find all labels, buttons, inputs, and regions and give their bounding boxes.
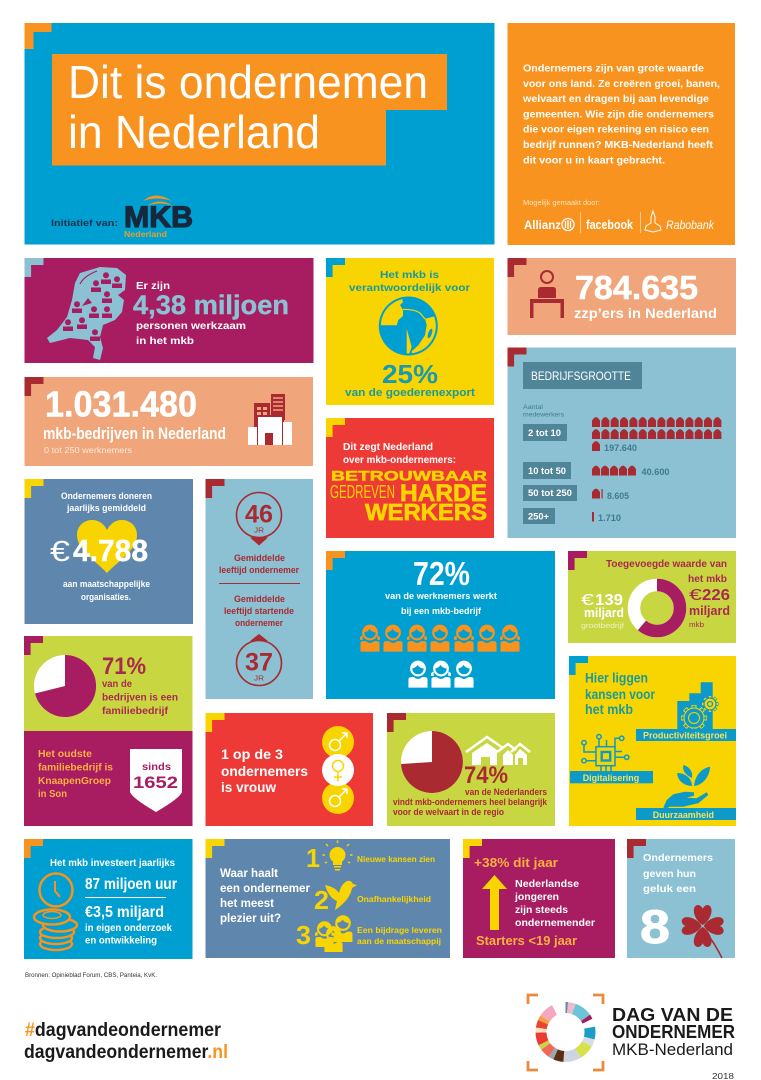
caption: investment: in eigen onderzoek [85, 923, 172, 934]
text: young people: ondernemender [515, 917, 595, 929]
caption: zzp: zzp’ers in Nederland [574, 305, 717, 321]
sponsors: Mogelijk gemaakt door: [523, 198, 600, 207]
chart: pie 74% [401, 731, 463, 793]
item 2: independence: 2 [314, 885, 329, 915]
question [220, 868, 311, 925]
text: happiness: geluk een [643, 883, 696, 895]
text: 1 in 3: 1 op de 3 [221, 746, 283, 762]
caption: donations: organisaties. [81, 592, 131, 603]
panel: wat zegt Nederland [326, 418, 494, 538]
heading: added value: het mkb [688, 574, 727, 585]
caption: export: van de goederenexport [345, 387, 475, 399]
logo: Dag van de Ondernemer: DAG VAN DE [612, 1005, 733, 1025]
caption: family companies: familiebedrijf [102, 706, 169, 717]
panel: added value [568, 551, 736, 643]
intro text: welvaart en dragen bij aan levendige [522, 93, 709, 105]
icon: coins [34, 910, 77, 950]
stat: 8: 8 [640, 900, 670, 953]
heading: opportunities: kansen voor [585, 687, 656, 702]
initiative label: Initiatief van: [51, 218, 118, 228]
heading: opportunities [585, 670, 656, 717]
label: grootbedrijf [581, 592, 624, 630]
caption: welfare: van de Nederlanders [465, 787, 547, 797]
item 2: independence: Onafhankelijkheid [357, 894, 431, 904]
stat: zzp number: 784.635 [575, 269, 698, 306]
stat: hours: 87 miljoen uur [85, 876, 177, 893]
icon: chip [582, 734, 629, 772]
sponsors: facebook [586, 217, 634, 232]
word cloud: GEDREVEN [330, 482, 395, 502]
item 3: contribution [296, 916, 442, 952]
label: mkb: 226 [702, 587, 730, 604]
row: 2 tot 10 [523, 417, 721, 453]
item 1: new opportunities [306, 840, 435, 873]
axis label: Aantal [523, 404, 544, 411]
caption: donations: aan maatschappelijke [63, 579, 150, 590]
caption: family companies: van de [102, 679, 132, 690]
caption: starter age: leeftijd startende [224, 606, 294, 616]
caption: family companies: bedrijven is een [102, 692, 178, 704]
row: 10 tot 50 [523, 462, 670, 479]
row: 50 tot 250: 50 tot 250 [528, 488, 572, 498]
sources: Bronnen: Opinieblad Forum, CBS, Panteia, KvK. [25, 972, 157, 979]
axis label: medewerkers [523, 412, 565, 418]
word cloud: BETROUWBAAR [331, 468, 487, 484]
caption: welfare [393, 787, 548, 817]
stat: 72%: 72% [413, 555, 470, 592]
text: young people: Nederlandse [515, 878, 579, 890]
text: oldest company: Het oudste [38, 749, 92, 760]
caption: starters: Starters <19 jaar [476, 934, 577, 948]
item 1: new opportunities: 1 [306, 843, 320, 873]
label: duurzaamheid [636, 808, 736, 821]
heading: opportunities: het mkb [585, 702, 633, 717]
chart: pie 71% [34, 655, 96, 717]
caption: employees [385, 591, 498, 617]
text: workers [133, 280, 289, 347]
text: oldest company: familiebedrijf is [38, 762, 113, 774]
icon: clock [40, 874, 72, 906]
stat: 25%: 25% [382, 359, 438, 389]
question: een ondernemer [220, 883, 311, 895]
caption: investment [85, 923, 172, 946]
text: oldest company: in Son [38, 789, 67, 800]
heading: investment: Het mkb investeert jaarlijks [50, 858, 175, 869]
text: young people [514, 878, 595, 929]
stat: 71%: 71% [102, 653, 146, 680]
icon: houses [466, 737, 530, 765]
heading: bedrijfsgrootte: BEDRIJFSGROOTTE [531, 369, 631, 383]
question: Waar haalt [220, 868, 278, 880]
label: mkb: mkb [689, 622, 704, 629]
icon: growth bars and gears [677, 682, 718, 731]
heading: bedrijfsgrootte [523, 362, 642, 389]
icon: globe [378, 295, 440, 356]
row: 50 tot 250 [523, 485, 629, 501]
stat: donation amount: 4.788 [73, 533, 148, 568]
badge: age 46: JR [254, 526, 265, 534]
heading: donations: Ondernemers doneren [61, 491, 152, 502]
text: workers: 4,38 miljoen [133, 290, 289, 320]
text: 1 in 3 [221, 746, 308, 795]
logo: MKB Nederland: Nederland [124, 229, 167, 239]
badge: age 37 [236, 634, 282, 686]
text: oldest company: KnaapenGroep [38, 776, 111, 787]
heading: opinion [343, 442, 456, 466]
heading: export: Het mkb is [380, 269, 439, 281]
heading: export: verantwoordelijk voor [349, 282, 470, 294]
item 3: contribution: 3 [296, 920, 311, 950]
sub caption: 0 tot 250 werknemers [44, 445, 132, 455]
heading: added value: Toegevoegde waarde van [606, 559, 727, 570]
panel: average age [206, 479, 313, 699]
stat: amount: €3,5 miljard [85, 904, 164, 921]
caption: investment: en ontwikkeling [85, 936, 157, 946]
text: happiness [643, 852, 713, 895]
heading: donations [61, 491, 152, 514]
text: workers: in het mkb [136, 335, 194, 347]
row: 2 tot 10: 2 tot 10 [528, 428, 561, 438]
caption: welfare: vindt mkb-ondernemers heel belangrijk [393, 797, 548, 807]
panel: donations [24, 479, 193, 624]
intro text: die voor eigen rekening en risico een [523, 124, 709, 136]
badge: age 46 [236, 492, 282, 546]
badge: since 1652 [130, 749, 182, 812]
chart: donut [634, 585, 680, 631]
row: 250+ [523, 508, 621, 524]
intro text: bedrijf runnen? MKB-Nederland heeft [523, 139, 713, 151]
row: 10 tot 50: 40.600 [642, 467, 670, 477]
logo: MKB Nederland: MKB [124, 201, 193, 234]
row: 10 tot 50: 10 tot 50 [528, 466, 566, 476]
stat: number of companies: 1.031.480 [45, 384, 197, 424]
icons: gender symbols [322, 726, 354, 814]
text: workers: Er zijn [136, 280, 170, 292]
sponsors [523, 198, 715, 233]
panel: zzp [507, 258, 736, 335]
row: 2 tot 10: 197.640 [604, 443, 637, 453]
label: digitalisering [570, 771, 653, 784]
title: in Nederland [68, 106, 320, 158]
question: het meest [220, 898, 274, 910]
caption: employees: van de werknemers werkt [385, 591, 498, 602]
hashtag: #dagvandeondernemer [25, 1020, 222, 1041]
item 2: independence [314, 881, 431, 915]
heading: export [349, 269, 470, 294]
intro text: Ondernemers zijn van grote waarde [523, 62, 704, 74]
panel: introduction [508, 23, 735, 245]
intro text: gemeenten. Wie zijn die ondernemers [523, 108, 714, 120]
label: grootbedrijf: grootbedrijf [581, 623, 624, 630]
icon: map of the Netherlands [47, 267, 126, 360]
text: happiness: geven hun [643, 868, 696, 880]
stat: +38%: +38% dit jaar [474, 856, 558, 870]
question: plezier uit? [220, 913, 281, 925]
sponsors: Rabobank [666, 220, 715, 232]
item 3: contribution: Een bijdrage leveren [357, 925, 442, 935]
badge: since 1652: 1652 [133, 773, 178, 792]
panel: mkb-bedrijven [24, 377, 313, 466]
panel: export [326, 258, 494, 405]
label: mkb: miljard [689, 604, 730, 618]
website: dagvandeondernemer.nl [24, 1042, 228, 1063]
title: Dit is ondernemen [68, 56, 428, 108]
panel: happiness [627, 839, 735, 958]
badge: age 37: 37 [245, 648, 273, 676]
label: productiviteitsgroei: Productiviteitsgroei [643, 730, 727, 742]
row: 250+: 1.710 [598, 513, 621, 523]
label: mkb: € [689, 587, 702, 604]
panel: most fun [206, 839, 450, 958]
heading: added value [606, 559, 727, 585]
title [52, 54, 447, 166]
panel: 72% employees [326, 551, 555, 699]
caption: average age: leeftijd ondernemer [219, 565, 299, 575]
axis label [523, 404, 565, 418]
sponsors: Allianz [524, 220, 561, 232]
intro text [522, 62, 720, 166]
logo: Dag van de Ondernemer [528, 995, 735, 1070]
label: duurzaamheid: Duurzaamheid [653, 810, 714, 821]
caption: average age: Gemiddelde [234, 553, 285, 563]
item 1: new opportunities: Nieuwe kansen zien [357, 854, 435, 864]
row: 250+: 250+ [528, 512, 549, 522]
caption: companies: mkb-bedrijven in Nederland [43, 425, 226, 443]
text: young people: jongeren [514, 891, 559, 903]
badge: since 1652: sinds [142, 761, 171, 773]
label: grootbedrijf: 139 [595, 592, 623, 609]
logo: Dag van de Ondernemer: ONDERNEMER [612, 1022, 735, 1042]
intro text: voor ons land. Ze creëren groei, banen, [523, 78, 720, 90]
word cloud: WERKERS [365, 499, 487, 525]
word cloud [330, 468, 487, 525]
intro text: dit voor u in kaart gebracht. [523, 154, 665, 166]
heading: opportunities: Hier liggen [585, 670, 648, 686]
text: 1 in 3: is vrouw [221, 779, 276, 795]
icon: heart [77, 520, 137, 573]
text: young people: zijn steeds [515, 904, 568, 916]
logo: Dag van de Ondernemer: MKB-Nederland [612, 1040, 733, 1059]
badge: age 37: JR [254, 674, 265, 682]
icons: orange people [360, 626, 520, 652]
panel: investment [24, 839, 192, 959]
panel: bedrijfsgrootte [507, 348, 736, 538]
icons: white people [408, 662, 474, 688]
icon: buildings [248, 394, 292, 445]
arrow: up [482, 875, 507, 930]
heading: donations: jaarlijks gemiddeld [66, 503, 146, 514]
label: grootbedrijf: miljard [584, 606, 624, 620]
word cloud: HARDE [400, 480, 487, 507]
stat: donation amount: € [50, 536, 70, 568]
caption: starter age: Gemiddelde [234, 594, 285, 604]
label: digitalisering: Digitalisering [583, 773, 639, 784]
caption: donations [63, 579, 150, 603]
label: mkb [689, 587, 730, 629]
panel: young starters [463, 839, 615, 958]
caption: employees: bij een mkb-bedrijf [401, 606, 482, 617]
panel: opportunities [569, 656, 736, 826]
panel: 4,38 miljoen [24, 258, 314, 363]
icon: hand with plant [663, 765, 710, 808]
panel: 74% Dutch [387, 713, 555, 826]
text: oldest company [38, 749, 113, 800]
icon: clover [682, 905, 724, 958]
caption: family companies [102, 679, 178, 717]
caption: average age [219, 553, 299, 575]
badge: age 46: 46 [245, 500, 273, 528]
caption: welfare: voor de welvaart in de regio [393, 807, 504, 817]
text: 1 in 3: ondernemers [221, 763, 308, 779]
panel: women entrepreneurs [206, 713, 373, 826]
row: 50 tot 250: 8.605 [607, 491, 629, 501]
caption: starter age [224, 594, 294, 628]
text: workers: personen werkzaam [136, 320, 246, 332]
label: grootbedrijf: € [581, 592, 594, 609]
item 3: contribution: aan de maatschappij [357, 936, 441, 946]
heading: opinion: Dit zegt Nederland [343, 442, 433, 453]
heading: opinion: over mkb-ondernemers: [343, 455, 456, 466]
caption: starter age: ondernemer [235, 618, 283, 628]
panel: family companies [24, 636, 192, 826]
text: happiness: Ondernemers [643, 852, 713, 864]
icon: person at desk [530, 271, 564, 318]
stat: 74%: 74% [464, 762, 508, 789]
panel: hero [24, 23, 494, 244]
